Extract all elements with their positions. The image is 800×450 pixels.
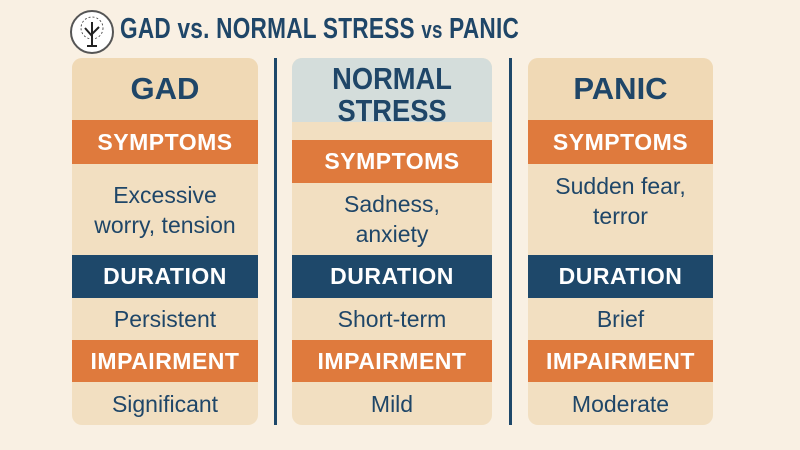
divider right xyxy=(509,58,512,425)
heading: Panic: PANIC xyxy=(573,71,668,106)
heading: GAD xyxy=(72,58,258,120)
text: symptoms: anxiety xyxy=(356,221,428,247)
bar: duration: DURATION xyxy=(103,263,227,289)
bar: duration xyxy=(292,255,492,298)
text: symptoms xyxy=(555,173,686,229)
bar: duration: DURATION xyxy=(559,263,682,289)
heading: Normal stress xyxy=(292,58,492,122)
text: symptoms: terror xyxy=(593,203,648,229)
bar: impairment: IMPAIRMENT xyxy=(91,348,239,374)
bar: impairment xyxy=(528,340,713,382)
text: impairment: Moderate xyxy=(572,390,669,416)
text: symptoms xyxy=(94,182,236,238)
bar: duration xyxy=(72,255,258,298)
text: symptoms: worry, tension xyxy=(94,212,236,238)
bar: symptoms xyxy=(528,120,713,164)
bar: symptoms: SYMPTOMS xyxy=(324,148,460,174)
panel: Panic xyxy=(528,58,713,425)
bar: duration: DURATION xyxy=(330,263,454,289)
panel: Normal stress xyxy=(292,58,492,425)
title: GAD vs. NORMAL STRESS vs PANIC xyxy=(120,13,519,45)
text: duration: Brief xyxy=(597,306,644,332)
text: impairment: Mild xyxy=(371,390,413,416)
heading: Normal stress: STRESS xyxy=(337,93,447,128)
bar: symptoms xyxy=(292,140,492,183)
bar: impairment xyxy=(292,340,492,382)
bar: symptoms: SYMPTOMS xyxy=(553,128,688,154)
bar: impairment: IMPAIRMENT xyxy=(318,348,466,374)
divider left xyxy=(274,58,277,425)
bar: duration xyxy=(528,255,713,298)
text: symptoms xyxy=(344,191,440,247)
heading: GAD: GAD xyxy=(131,71,199,106)
icon: tree logo xyxy=(70,10,114,54)
text: symptoms: Sadness, xyxy=(344,191,440,217)
bar: impairment: IMPAIRMENT xyxy=(546,348,695,374)
bar: symptoms xyxy=(72,120,258,164)
heading: Normal stress: NORMAL xyxy=(332,61,452,96)
text: duration: Persistent xyxy=(114,306,216,332)
text: symptoms: Excessive xyxy=(113,182,217,208)
bar: symptoms: SYMPTOMS xyxy=(97,128,233,154)
text: duration: Short-term xyxy=(338,306,446,332)
text: impairment: Significant xyxy=(112,390,218,416)
text: symptoms: Sudden fear, xyxy=(555,173,686,199)
heading: Panic xyxy=(528,58,713,120)
bar: impairment xyxy=(72,340,258,382)
panel: GAD xyxy=(72,58,258,425)
